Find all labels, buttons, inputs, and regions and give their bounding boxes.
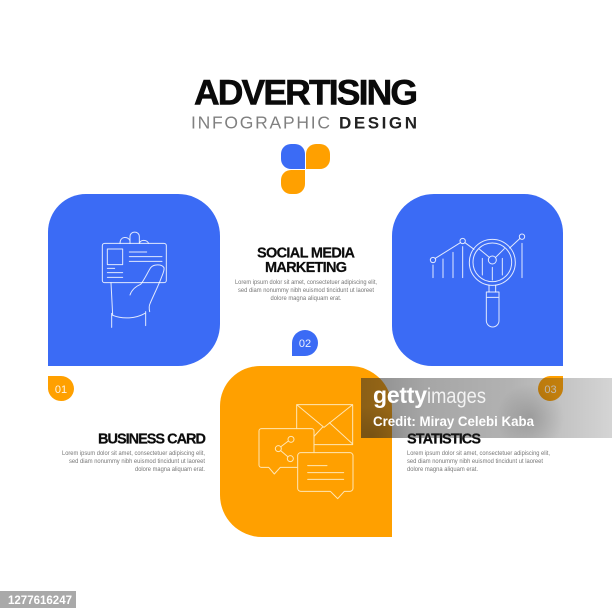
badge: 03: 03 xyxy=(544,384,557,396)
panel: statistics xyxy=(392,194,563,366)
text block: business card: BUSINESS CARD xyxy=(98,432,206,448)
title: DESIGN xyxy=(339,114,417,132)
title: INFOGRAPHIC xyxy=(191,112,330,132)
text block: business card: sed diam nonummy nibh euismod tincidunt ut laoreet xyxy=(69,458,205,465)
text block: business card xyxy=(62,432,206,473)
text block: statistics: Lorem ipsum dolor sit amet, consectetuer adipiscing elit, xyxy=(407,450,550,457)
text block: social media marketing: Lorem ipsum dolor sit amet, consectetuer adipiscing elit, xyxy=(235,279,377,286)
badge: 01 xyxy=(48,376,74,401)
badge: 03 xyxy=(538,376,563,401)
badge: 01: 01 xyxy=(55,384,67,396)
title: ADVERTISING xyxy=(194,72,418,112)
icon: chart under magnifying glass xyxy=(430,234,525,327)
text block: statistics: sed diam nonummy nibh euismod tincidunt ut laoreet xyxy=(407,458,543,465)
text block: social media marketing: sed diam nonummy nibh euismod tincidunt ut laoreet xyxy=(238,287,374,294)
text block: business card: Lorem ipsum dolor sit amet, consectetuer adipiscing elit, xyxy=(62,450,205,457)
text block: statistics: STATISTICS xyxy=(407,432,481,448)
icon: envelope and chat bubbles xyxy=(259,405,353,499)
logo mark xyxy=(281,144,330,194)
panel: communication xyxy=(220,366,392,537)
icon: hand holding card xyxy=(102,232,166,327)
badge: 02 xyxy=(292,330,318,356)
text block: statistics: dolore magna aliquam erat. xyxy=(407,466,478,473)
badge: 02: 02 xyxy=(299,338,311,350)
text block: social media marketing: MARKETING xyxy=(265,260,347,276)
watermark: getty images credit: images xyxy=(427,385,486,408)
watermark: getty images credit xyxy=(361,378,612,438)
text block: statistics xyxy=(407,432,550,473)
text block: business card: dolore magna aliquam erat. xyxy=(135,466,205,473)
text block: social media marketing: SOCIAL MEDIA xyxy=(257,246,356,262)
text block: social media marketing: dolore magna aliquam erat. xyxy=(270,295,342,302)
image id tag: 1277616247 xyxy=(8,593,72,607)
watermark: getty images credit: getty xyxy=(373,382,427,408)
watermark: getty images credit: Credit: Miray Celebi Kaba xyxy=(373,413,534,429)
text block: social media marketing xyxy=(235,246,377,302)
panel: business card xyxy=(48,194,220,366)
title xyxy=(191,72,418,132)
